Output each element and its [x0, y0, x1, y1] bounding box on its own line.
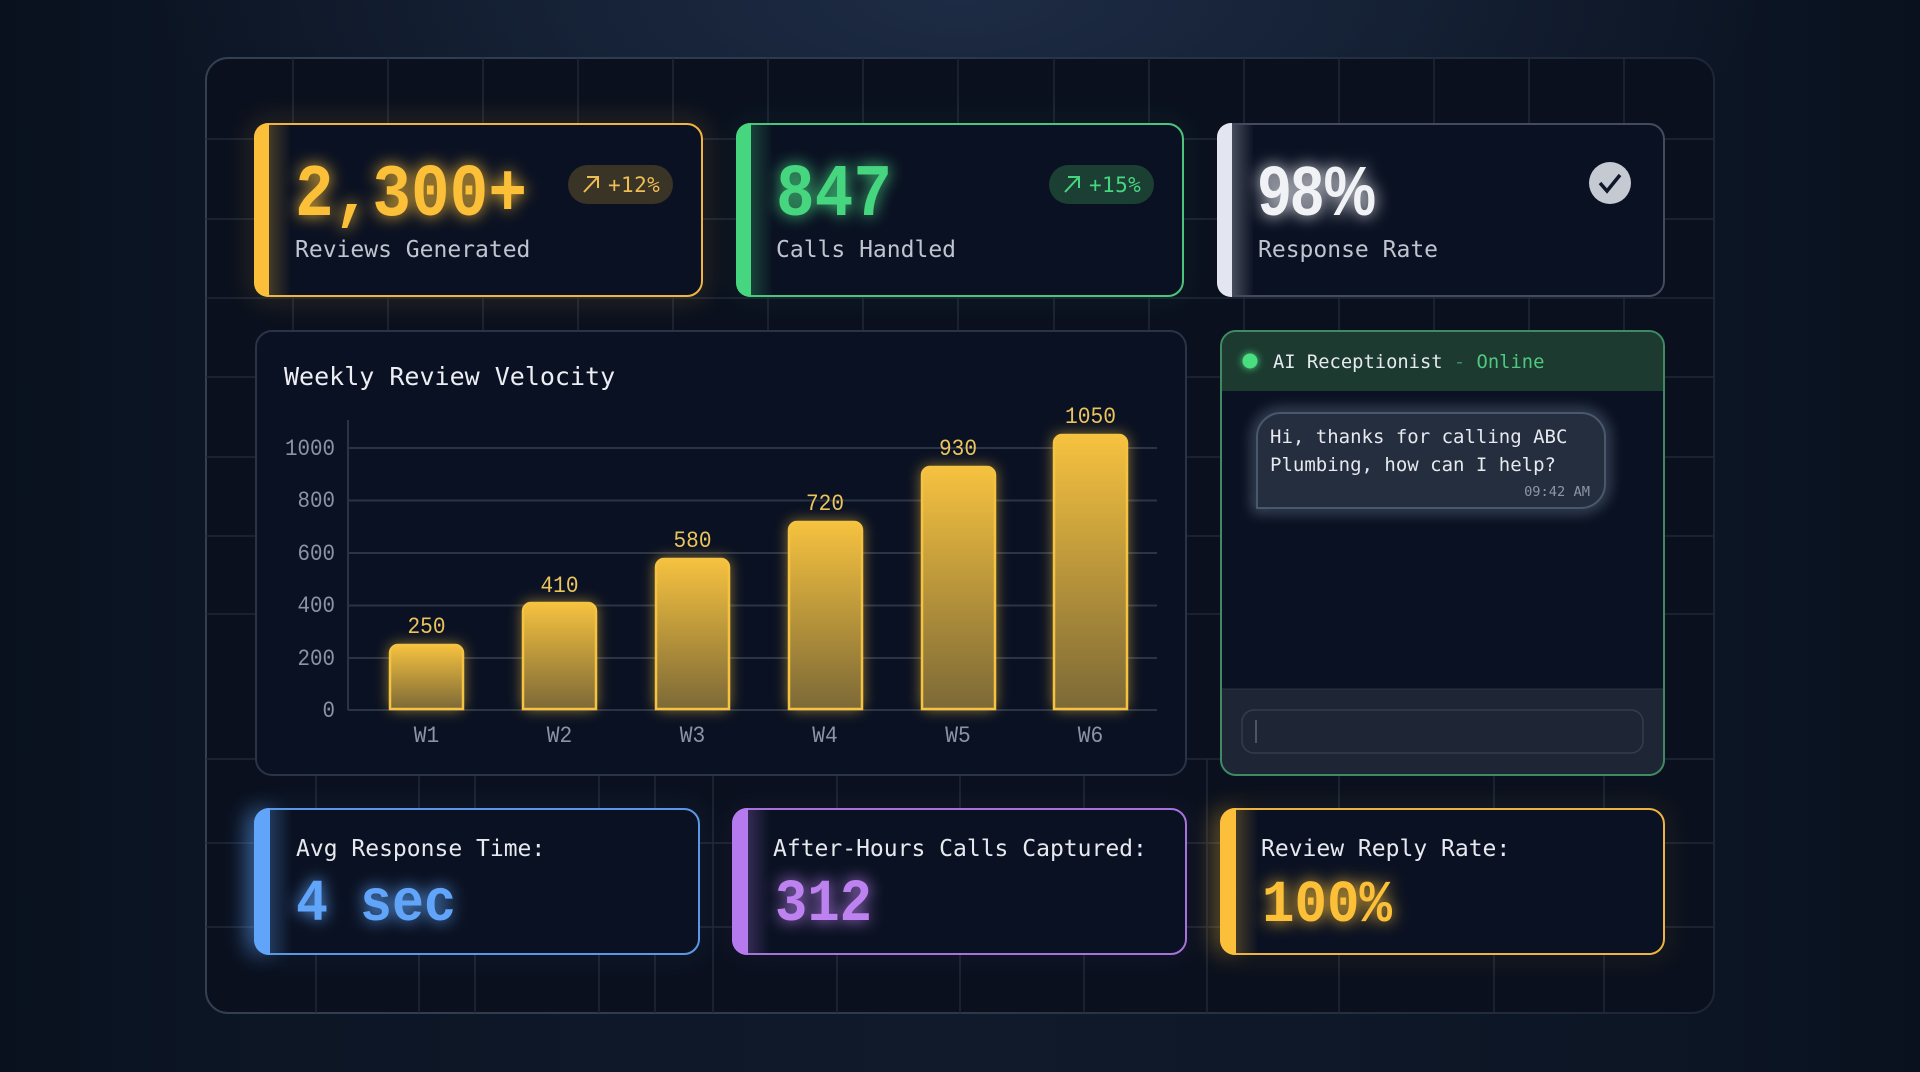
chat bubble: Hi, thanks for calling ABC [1270, 426, 1567, 448]
bar W3 580: 580 [674, 528, 712, 555]
y axis labels: 0 [322, 698, 335, 725]
bar W1 250: 250 [408, 614, 446, 641]
panel: Calls Handled [736, 123, 1183, 297]
bar W2 410: W2 [547, 723, 572, 750]
value: 100%: 100% [1262, 872, 1393, 939]
label: Review Reply Rate: [1261, 836, 1510, 862]
bar W3 580 [656, 528, 729, 750]
chart title: Weekly Review Velocity [284, 362, 615, 391]
value: 312: 312 [775, 871, 872, 938]
label: Response Rate [1258, 237, 1438, 263]
bar W1 250: W1 [414, 723, 439, 750]
bars glow [389, 434, 1128, 710]
panel: Weekly Review Velocity chart [256, 331, 1186, 775]
chat bubble [1257, 413, 1605, 508]
badge: +15%: +15% [1089, 173, 1141, 197]
bar W5 930: W5 [945, 723, 971, 750]
label: Calls Handled [776, 237, 956, 263]
y axis labels: 200 [298, 646, 335, 673]
panel: Review Reply Rate [1216, 808, 1664, 955]
panel: Response Rate [1217, 123, 1664, 297]
bar W4 720: W4 [812, 723, 838, 750]
bar W5 930 [922, 436, 995, 750]
badge: +12%: +12% [608, 173, 660, 197]
value: 4 sec: 4 sec [296, 871, 456, 938]
dashboard frame [206, 58, 1714, 1013]
label: Reviews Generated [295, 237, 530, 263]
bar W6 1050 [1054, 404, 1127, 750]
bar W6 1050: 1050 [1065, 404, 1116, 431]
panel: After-Hours Calls Captured [732, 808, 1186, 955]
input box [1242, 710, 1643, 753]
bar W6 1050: W6 [1078, 723, 1103, 750]
bar W4 720: 720 [806, 491, 844, 518]
bar W2 410 [523, 573, 596, 750]
chat header: AI Receptionist - Online [1273, 352, 1544, 373]
bar chart [285, 404, 1157, 750]
value: 98%: 98% [1258, 152, 1376, 230]
bar W5 930: 930 [939, 436, 977, 463]
panel: Avg Response Time [250, 808, 699, 955]
chat bubble: Plumbing, how can I help? [1270, 454, 1556, 476]
badge: +12% [568, 165, 673, 204]
bar W1 250 [390, 614, 463, 750]
status dot [1242, 354, 1258, 368]
y axis labels: 600 [298, 541, 335, 568]
y axis labels: 1000 [285, 436, 335, 463]
y axis labels: 800 [298, 488, 335, 515]
badge: +15% [1049, 165, 1154, 204]
chat bubble: 09:42 AM [1524, 484, 1590, 500]
bar W4 720 [789, 491, 862, 750]
label: Avg Response Time: [296, 836, 545, 862]
panel: AI Receptionist chat [1221, 331, 1664, 775]
y axis labels: 400 [298, 593, 335, 620]
bar W2 410: 410 [540, 573, 578, 600]
y axis labels [285, 436, 335, 725]
label: After-Hours Calls Captured: [773, 836, 1147, 862]
panel: Reviews Generated [254, 123, 702, 297]
value: 847: 847 [776, 154, 892, 238]
icon: check [1589, 162, 1631, 204]
bar W3 580: W3 [680, 723, 705, 750]
value: 2,300+: 2,300+ [295, 154, 527, 238]
